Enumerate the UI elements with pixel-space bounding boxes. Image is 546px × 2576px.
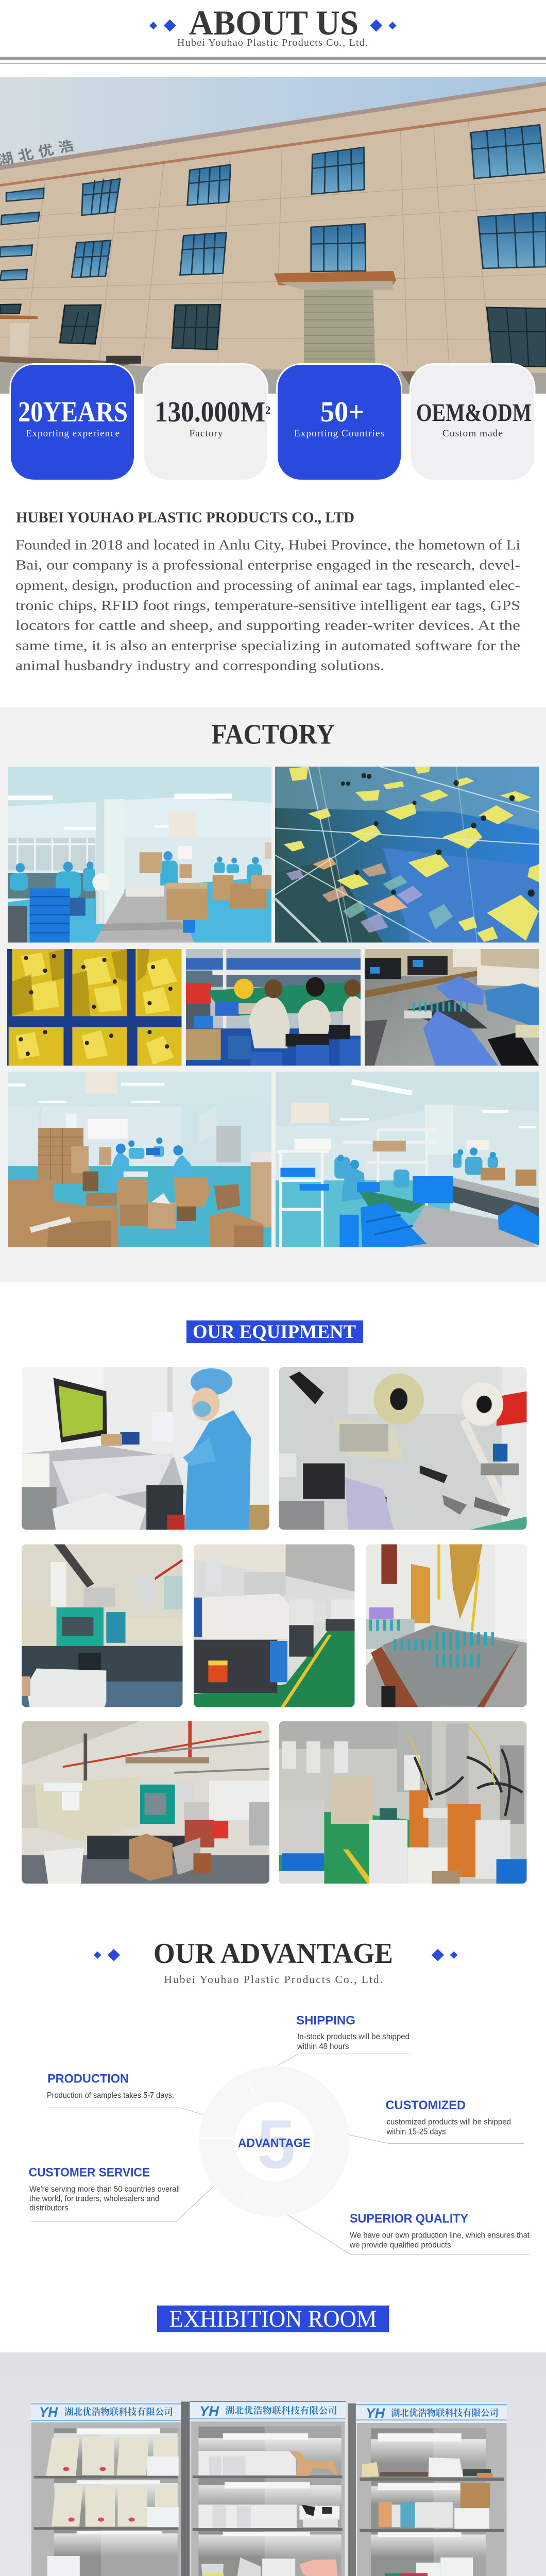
stat caption: Factory — [190, 428, 223, 439]
photo: clean room workshop — [8, 767, 271, 943]
photo: robotic dispenser with teal pins — [366, 1545, 526, 1707]
cabinet sign 3 — [366, 2405, 499, 2421]
callout: production: Production of samples takes 5-7 days. — [47, 2091, 174, 2100]
stat caption: Exporting experience — [26, 428, 120, 439]
decorative diamonds right — [432, 1949, 457, 1961]
equipment heading badge: OUR EQUIPMENT — [193, 1321, 356, 1343]
photo: ear tags on glass display — [275, 767, 539, 943]
callout: customized: customized products will be shipped — [386, 2118, 511, 2127]
callout: superior quality: We have our own production line, which ensures that — [350, 2231, 530, 2240]
cabinet sign 1: YH — [39, 2404, 58, 2420]
superscript: 2 — [265, 404, 271, 416]
center label: ADVANTAGE — [238, 2137, 311, 2150]
stat card: factory area — [143, 363, 271, 481]
photo: factory building exterior — [0, 77, 546, 394]
decorative diamonds right — [370, 20, 397, 32]
factory heading: FACTORY — [211, 718, 335, 750]
company description — [15, 537, 520, 673]
photo: row of FCS injection machines — [194, 1545, 354, 1707]
title: ABOUT US — [189, 4, 359, 42]
subtitle: Hubei Youhao Plastic Products Co., Ltd. — [164, 1973, 383, 1986]
callout: customized: within 15-25 days — [386, 2128, 446, 2137]
callout: shipping — [277, 2014, 410, 2066]
callout: production: PRODUCTION — [47, 2072, 129, 2086]
cabinet sign 1: 湖北优浩物联科技有限公司 — [64, 2407, 173, 2417]
photo: roller and film machine — [279, 1367, 526, 1530]
cabinet sign 3: YH — [366, 2405, 385, 2421]
company description: Founded in 2018 and located in Anlu City, Hubei Province, the hometown of Li — [15, 537, 520, 553]
photo: injection molding machine teal — [22, 1545, 182, 1707]
callout: customer service: distributors — [29, 2204, 69, 2213]
photo: yellow ear tags in crates — [7, 949, 181, 1065]
callout: customized — [348, 2098, 524, 2143]
photo: injection machine with grinder — [22, 1721, 269, 1884]
stat value: 130.000M — [155, 396, 265, 428]
callout: superior quality: we provide qualified products — [349, 2241, 451, 2249]
company heading: HUBEI YOUHAO PLASTIC PRODUCTS CO., LTD — [16, 510, 354, 526]
title: OUR ADVANTAGE — [153, 1938, 393, 1970]
callout: shipping: SHIPPING — [296, 2014, 355, 2028]
cabinet sign 2 — [199, 2403, 337, 2419]
cabinet sign 3: 湖北优浩物联科技有限公司 — [391, 2408, 499, 2418]
callout: shipping: within 48 hours — [297, 2042, 349, 2051]
stat caption: Custom made — [442, 428, 503, 439]
company description: same time, it is also an enterprise specializing in automated software for the — [15, 637, 520, 653]
panel: factory — [0, 707, 546, 1282]
stat caption: Exporting Countries — [294, 428, 384, 439]
stat value: 50+ — [320, 396, 364, 428]
callout: customized: CUSTOMIZED — [385, 2098, 466, 2112]
photo: exhibition showcase cabinets front — [0, 2352, 546, 2576]
exhibition room heading badge: EXHIBITION ROOM — [169, 2306, 377, 2332]
photo: operator at labeling machine — [22, 1367, 269, 1530]
decorative diamonds left — [149, 20, 176, 32]
stat card: oem and odm — [410, 363, 536, 481]
photo: workers at assembly table — [186, 949, 361, 1065]
company description: Bai, our company is a professional enterprise engaged in the research, devel- — [15, 557, 520, 573]
cabinet sign 2: 湖北优浩物联科技有限公司 — [226, 2405, 337, 2416]
callout: shipping: In-stock products will be shipped — [297, 2032, 410, 2041]
callout: customer service — [29, 2166, 214, 2221]
stat card: exporting countries — [276, 363, 402, 481]
callout: customer service: CUSTOMER SERVICE — [29, 2166, 150, 2180]
company description: tronic chips, RFID foot rings, temperature-sensitive intelligent ear tags, GPS — [15, 597, 520, 613]
advantage ring diagram — [199, 2066, 349, 2217]
photo: packing room with cartons — [8, 1072, 271, 1247]
decorative diamonds left — [94, 1949, 120, 1961]
big numeral 5: 5 — [257, 2106, 295, 2183]
stat value: 20YEARS — [18, 396, 128, 428]
photo: vertical molding machines — [279, 1721, 526, 1884]
subtitle: Hubei Youhao Plastic Products Co., Ltd. — [177, 37, 368, 48]
section header: about us — [149, 4, 397, 48]
callout: customer service: the world, for traders, wholesalers and — [29, 2195, 159, 2204]
company description: opment, design, production and processing of animal ear tags, implanted elec- — [15, 577, 520, 593]
stat card: 20 years — [9, 363, 135, 481]
cabinet sign 2: YH — [199, 2403, 219, 2419]
company description: locators for cattle and sheep, and supporting reader-writer devices. At the — [15, 617, 520, 633]
section header: our advantage — [94, 1938, 457, 1986]
cabinet sign 1 — [39, 2404, 173, 2420]
callout: superior quality — [287, 2212, 530, 2255]
callout: customer service: We're serving more than 50 countries overall — [29, 2185, 180, 2194]
callout: superior quality: SUPERIOR QUALITY — [350, 2212, 468, 2226]
company description: animal husbandry industry and corresponding solutions. — [15, 657, 384, 673]
photo: production line with blue crates — [276, 1072, 539, 1247]
callout: production — [47, 2072, 203, 2115]
photo: gloved hands assembling parts — [365, 949, 539, 1065]
